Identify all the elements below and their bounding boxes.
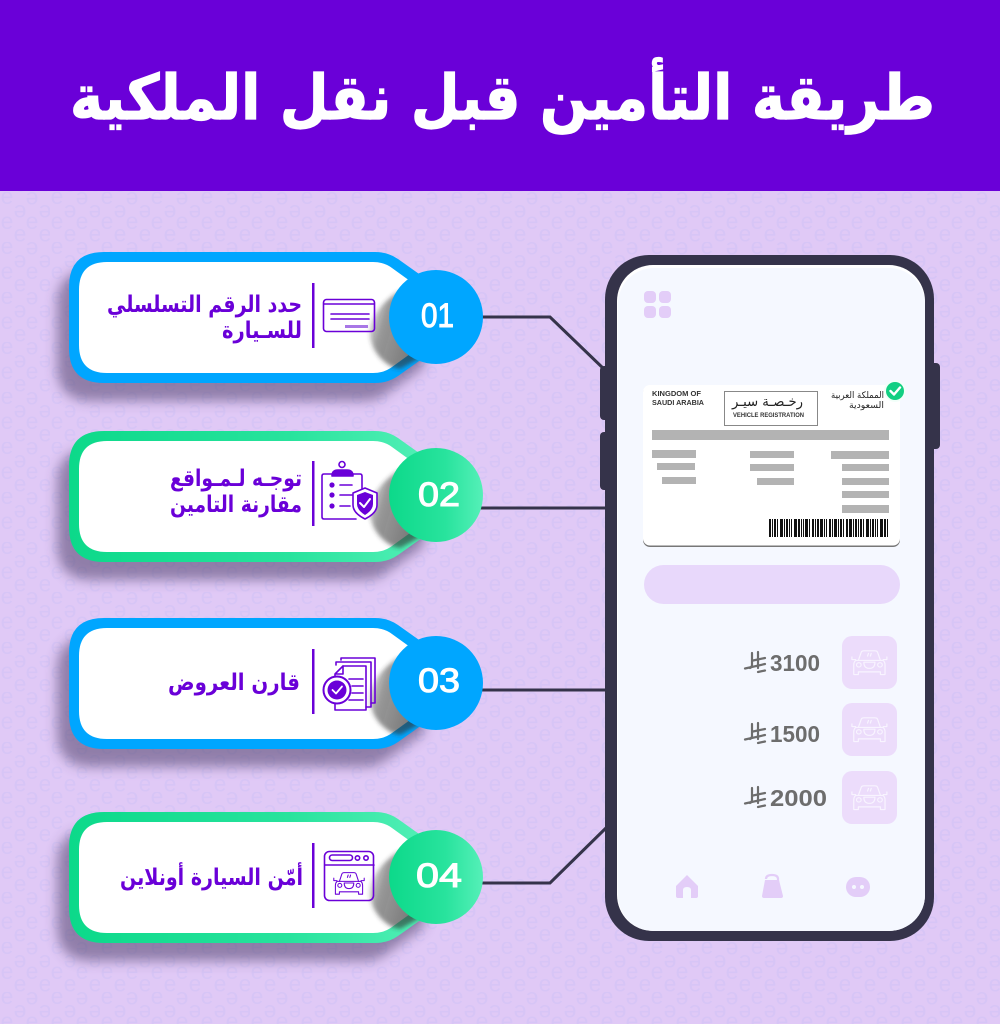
step text (170, 466, 302, 518)
card border (69, 618, 436, 749)
number badge: 01 (421, 297, 454, 335)
phone screen edge (617, 265, 925, 931)
step card 03 (57, 618, 483, 767)
title: طريقة التأمين قبل نقل الملكية (70, 57, 935, 134)
phone screen (618, 268, 925, 931)
number badge: 04 (416, 857, 462, 895)
step text: قارن العروض (168, 670, 300, 696)
icon: browser with car (324, 852, 374, 900)
number badge: 02 (418, 476, 460, 514)
icon: documents with seal (324, 658, 375, 710)
price row 1500 (745, 703, 897, 756)
card shadow (57, 449, 424, 580)
number badge: 03 (418, 662, 460, 700)
phone side buttons (600, 363, 940, 490)
step text: أمّن السيارة أونلاين (120, 861, 303, 891)
step text: للسـيارة (222, 318, 302, 344)
card shadow (57, 270, 424, 401)
vehicle registration card: VEHICLE REGISTRATION (733, 412, 804, 419)
card shadow (57, 830, 424, 961)
connector lines (480, 317, 608, 883)
card face (79, 628, 410, 739)
barcode (769, 519, 889, 537)
icon: home (676, 875, 698, 898)
vehicle registration card: SAUDI ARABIA (652, 398, 705, 407)
phone (600, 255, 940, 941)
step card 04 (57, 812, 483, 961)
step text: حدد الرقم التسلسلي (107, 292, 302, 318)
vehicle registration card: KINGDOM OF (652, 389, 701, 398)
vehicle registration card: رخـصـة سيـر (731, 394, 803, 410)
vehicle registration card (643, 380, 906, 547)
price row 2000: 2000 (770, 785, 827, 811)
step card 01 (57, 252, 483, 401)
divider (312, 461, 314, 526)
step text (107, 292, 302, 344)
step text: مقارنة التامين (170, 492, 302, 518)
number badge (389, 636, 483, 730)
circle shadow on card (370, 658, 436, 735)
card shadow (57, 636, 424, 767)
vehicle registration card: المملكة العربية (831, 391, 884, 401)
icon: bag (762, 875, 783, 898)
icon: menu grid (644, 291, 671, 318)
card border (69, 252, 436, 383)
card border (69, 431, 436, 562)
divider (312, 649, 314, 714)
circle shadow on card (370, 852, 436, 929)
number badge (389, 270, 483, 364)
price row 1500: 1500 (770, 721, 820, 747)
card face (79, 822, 410, 933)
step text: توجـه لـمـواقع (170, 466, 302, 492)
icon: id card (324, 300, 374, 332)
icon: clipboard and shield (322, 462, 377, 519)
number badge (389, 448, 483, 542)
divider (312, 843, 314, 908)
icon: green check (884, 380, 906, 402)
header band (0, 0, 1000, 191)
step card 02 (57, 431, 483, 580)
search pill (644, 565, 900, 604)
phone body (605, 255, 934, 941)
circle shadow on card (370, 471, 436, 548)
icon: chat (846, 877, 870, 897)
price row 3100 (745, 636, 897, 689)
number badge (389, 830, 483, 924)
price row 3100: 3100 (770, 650, 820, 676)
divider (312, 283, 314, 348)
circle shadow on card (370, 292, 436, 369)
card border (69, 812, 436, 943)
vehicle registration card: السعودية (849, 401, 884, 411)
price row 2000 (745, 771, 897, 824)
card face (79, 441, 410, 552)
card face (79, 262, 410, 373)
